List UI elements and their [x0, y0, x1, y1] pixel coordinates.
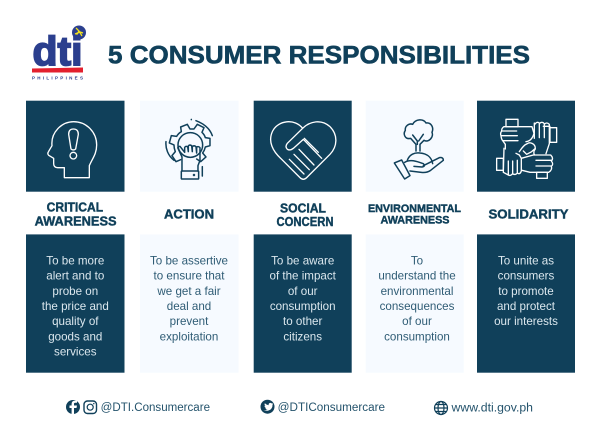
description: our interests — [494, 315, 558, 328]
description: consumption — [270, 300, 336, 313]
panel: critical awareness — [26, 101, 124, 373]
description: exploitation — [160, 330, 218, 343]
icon: facebook — [66, 400, 80, 414]
heading: SOLIDARITY — [488, 208, 569, 222]
footer: website: www.dti.gov.ph — [450, 402, 533, 414]
description: of our — [288, 285, 318, 298]
logo: DTI Philippines: PHILIPPINES — [32, 76, 83, 80]
heading: SOCIAL — [280, 202, 326, 216]
heading: ENVIRONMENTAL — [368, 203, 462, 215]
description: consequences — [380, 300, 455, 313]
description: probe on — [52, 285, 98, 298]
description: To be more — [46, 254, 104, 268]
description: deal and — [167, 300, 211, 313]
description: To be assertive — [150, 254, 228, 268]
heading — [368, 203, 462, 226]
panel: social concern — [254, 101, 352, 373]
panel: solidarity — [477, 101, 575, 373]
icon: globe — [434, 402, 448, 414]
footer: facebook and instagram handle: @DTI.Consumercare — [101, 402, 210, 414]
icon panel: four joined hands — [477, 101, 575, 192]
description: consumers — [498, 270, 555, 283]
description: to promote — [498, 285, 554, 298]
description: to other — [283, 315, 322, 328]
description: To unite as — [498, 254, 554, 268]
description: of our — [402, 315, 432, 328]
description: quality of — [52, 315, 99, 328]
description: of the impact — [270, 270, 337, 283]
description — [26, 234, 124, 373]
description: To be aware — [271, 254, 334, 268]
description: and protect — [497, 300, 556, 313]
description — [140, 234, 238, 373]
description: services — [54, 345, 97, 358]
heading: AWARENESS — [35, 214, 117, 228]
footer: facebook and instagram handle — [66, 400, 210, 414]
icon panel: head with exclamation — [26, 101, 124, 192]
description — [366, 234, 464, 373]
description: to ensure that — [154, 270, 225, 283]
panel: action — [140, 101, 238, 373]
icon panel: tree in hand — [366, 101, 464, 192]
icon: twitter — [260, 400, 274, 414]
heading: CONCERN — [276, 215, 334, 229]
heading: CRITICAL — [47, 200, 104, 214]
description: we get a fair — [156, 285, 221, 298]
title: 5 CONSUMER RESPONSIBILITIES — [108, 42, 530, 69]
description — [254, 234, 352, 373]
description: goods and — [48, 330, 102, 343]
logo: DTI Philippines: dti — [32, 28, 82, 74]
icon panel: heart handshake — [254, 101, 352, 192]
description: To — [411, 254, 423, 268]
heading — [276, 202, 334, 229]
footer: twitter handle: @DTIConsumercare — [278, 402, 385, 414]
description: consumption — [384, 330, 450, 343]
heading — [35, 200, 117, 228]
icon: instagram — [84, 401, 96, 414]
description: environmental — [381, 285, 453, 298]
heading: ACTION — [164, 208, 214, 222]
description: alert and to — [46, 270, 104, 283]
description — [477, 234, 575, 373]
description: citizens — [283, 330, 322, 343]
description: the price and — [42, 300, 109, 313]
icon panel: hand on gear — [140, 101, 238, 192]
heading: AWARENESS — [380, 214, 450, 226]
panel: environmental awareness — [366, 101, 464, 373]
description: prevent — [170, 315, 209, 328]
description: understand the — [378, 270, 456, 283]
